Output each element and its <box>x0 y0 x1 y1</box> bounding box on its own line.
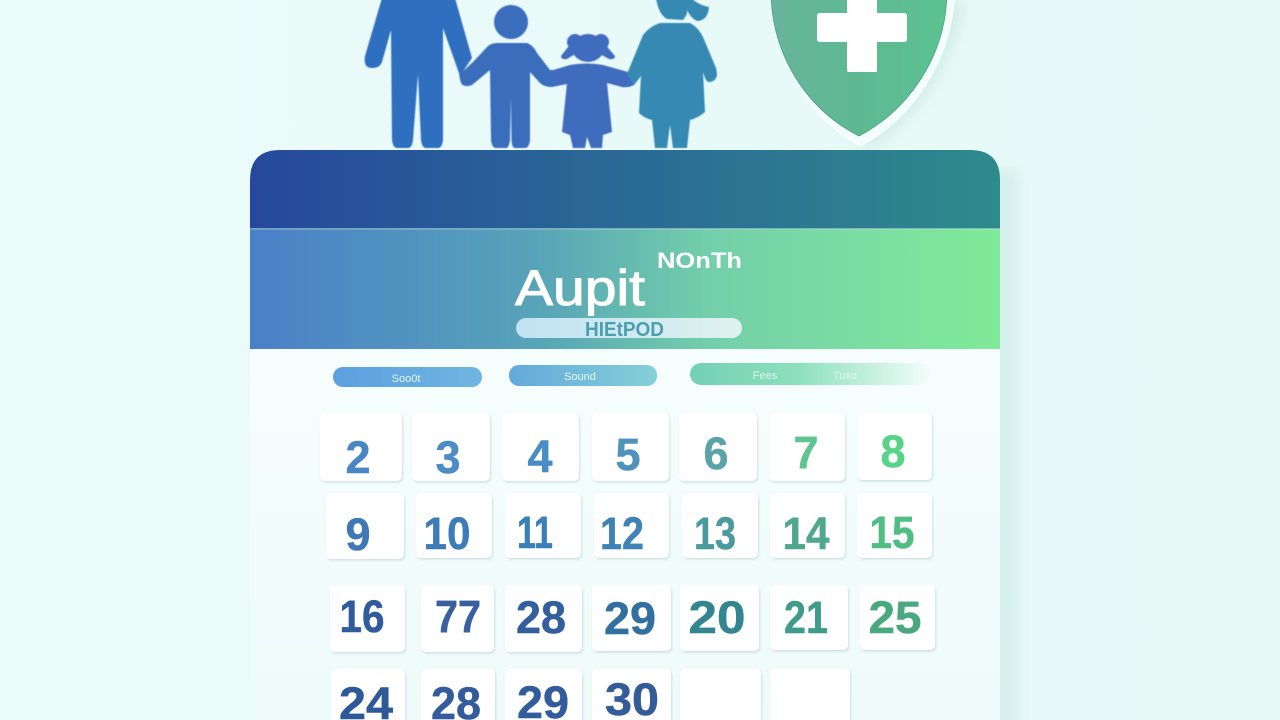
panel: calendar <box>250 150 1018 720</box>
date numbers: 13 <box>694 508 736 559</box>
weekday pill 3 <box>690 363 930 385</box>
date numbers: 3 <box>435 432 461 483</box>
date numbers: 16 <box>340 591 384 642</box>
weekday pill 2 <box>509 365 657 386</box>
month band <box>250 229 1000 349</box>
figure: boy <box>459 5 567 148</box>
date numbers: 77 <box>435 591 481 642</box>
date numbers: 12 <box>600 508 644 559</box>
figure: girl <box>550 34 641 148</box>
weekday pill 1 <box>333 367 482 387</box>
date numbers: 11 <box>517 507 553 558</box>
date numbers: 10 <box>424 508 470 559</box>
date numbers: 5 <box>615 429 641 480</box>
medical cross <box>817 0 907 72</box>
calendar top bar <box>250 150 1000 229</box>
date numbers: 15 <box>870 507 914 558</box>
heading: month name: Aupit <box>515 260 645 316</box>
date numbers <box>339 426 922 720</box>
date numbers: 25 <box>868 592 922 643</box>
figure: woman <box>627 0 717 148</box>
icon: family holding hands <box>365 0 717 148</box>
calendar shadow <box>262 170 1018 720</box>
shield shadow <box>800 0 966 150</box>
date numbers: 14 <box>782 508 830 559</box>
date numbers: 21 <box>784 592 828 643</box>
date numbers: 4 <box>527 431 553 482</box>
date numbers: 6 <box>703 428 729 479</box>
shield body <box>771 0 947 136</box>
date numbers: 29 <box>604 593 656 644</box>
figure: man <box>365 0 472 148</box>
date numbers: 28 <box>516 592 566 643</box>
date numbers: 7 <box>793 427 819 478</box>
subtitle pill: HIEtPOD <box>585 319 664 341</box>
weekday pill 2: Sound <box>564 371 596 383</box>
weekday pill 1: Soo0t <box>392 373 420 385</box>
weekday pill 3: Tuxo <box>833 370 857 382</box>
shield rim <box>772 0 955 147</box>
icon: medical shield <box>771 0 966 150</box>
date tiles <box>320 413 935 720</box>
heading: month tag: NOnTh <box>657 248 742 273</box>
subtitle pill <box>516 318 742 341</box>
calendar sheet <box>250 340 1000 720</box>
date numbers: 8 <box>880 426 906 477</box>
date numbers: 9 <box>345 509 371 560</box>
date numbers: 2 <box>345 432 371 483</box>
date numbers: 20 <box>688 592 746 643</box>
weekday pill 3: Fees <box>753 370 778 382</box>
